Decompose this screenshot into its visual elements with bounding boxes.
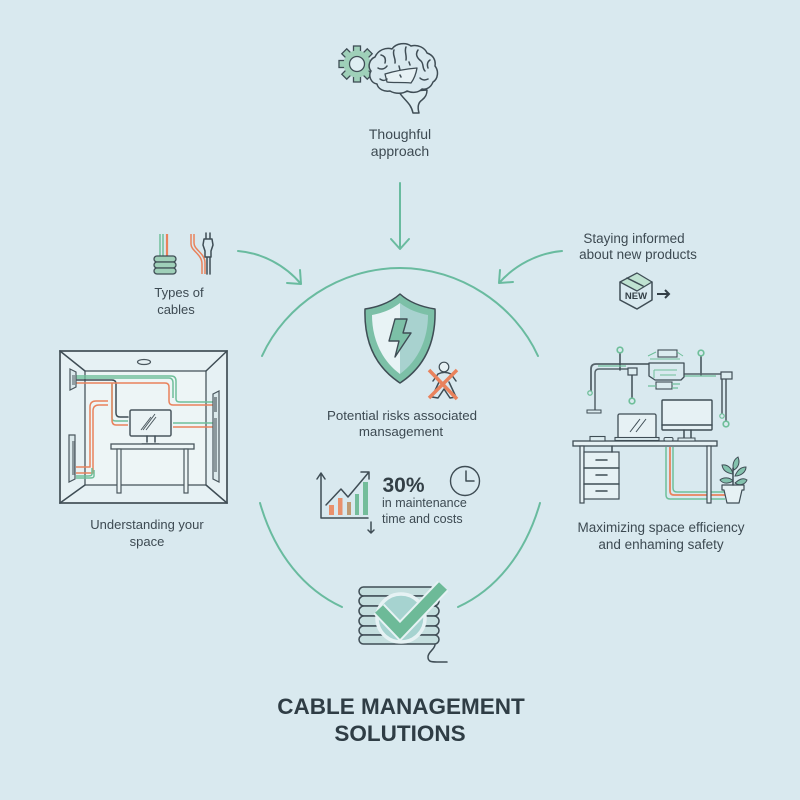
- circle: cycle bottom right arc: [458, 503, 540, 607]
- text: understanding your space: space: [130, 534, 164, 549]
- icon: gear and brain: [339, 44, 437, 113]
- cables: [76, 376, 216, 478]
- circle: cycle top arc: [262, 268, 538, 356]
- network diagram: [587, 347, 732, 427]
- label: NEW: NEW: [625, 291, 647, 302]
- monitor and desk: [111, 410, 194, 493]
- potted plant: [720, 457, 747, 503]
- green and orange desk cables: [666, 447, 725, 499]
- icon: person crossed out: [429, 362, 457, 399]
- icon: understanding your space room: [60, 351, 227, 503]
- circle: cycle bottom left arc: [260, 503, 342, 607]
- text: staying informed: about new products: [579, 247, 697, 262]
- text: types of cables: Types of: [154, 285, 204, 300]
- text: thoughtful approach: approach: [371, 143, 429, 159]
- stat: 30%: 30%: [382, 474, 425, 497]
- books: [590, 436, 605, 441]
- chart: rising bars with trend arrow: [317, 472, 374, 533]
- desk: [573, 441, 717, 503]
- arrow: left curved: [238, 251, 301, 284]
- icon: gear: [339, 46, 375, 82]
- title: CABLE MANAGEMENT: [277, 694, 525, 719]
- text: types of cables: cables: [157, 302, 195, 317]
- text: staying informed: Staying informed: [583, 231, 685, 246]
- icon: arrow right: [657, 290, 669, 298]
- icon: shield: [365, 294, 435, 383]
- icon: clock: [450, 466, 480, 496]
- icon: brain: [369, 44, 437, 113]
- title: SOLUTIONS: [334, 721, 466, 746]
- text: thoughtful approach: Thoughful: [369, 126, 431, 142]
- monitor: [662, 400, 712, 441]
- arrow: top down: [391, 183, 409, 249]
- icon: desk with network: [573, 347, 747, 503]
- icon: cable types: [154, 233, 213, 274]
- arrow: right curved: [499, 251, 562, 283]
- text: maintenance: in maintenance: [382, 496, 467, 510]
- text: maintenance: time and costs: [382, 512, 463, 526]
- text: maximizing space efficiency: and enhaming safety: [598, 537, 724, 552]
- text: potential risks: Potential risks associated: [327, 408, 477, 423]
- text: understanding your space: Understanding your: [90, 517, 204, 532]
- sockets: [69, 369, 219, 482]
- text: maximizing space efficiency: Maximizing space efficiency: [577, 520, 745, 535]
- icon: new box: [620, 273, 669, 309]
- text: potential risks: mansagement: [359, 424, 443, 439]
- laptop: [615, 414, 659, 440]
- icon: coil with check: [359, 586, 447, 662]
